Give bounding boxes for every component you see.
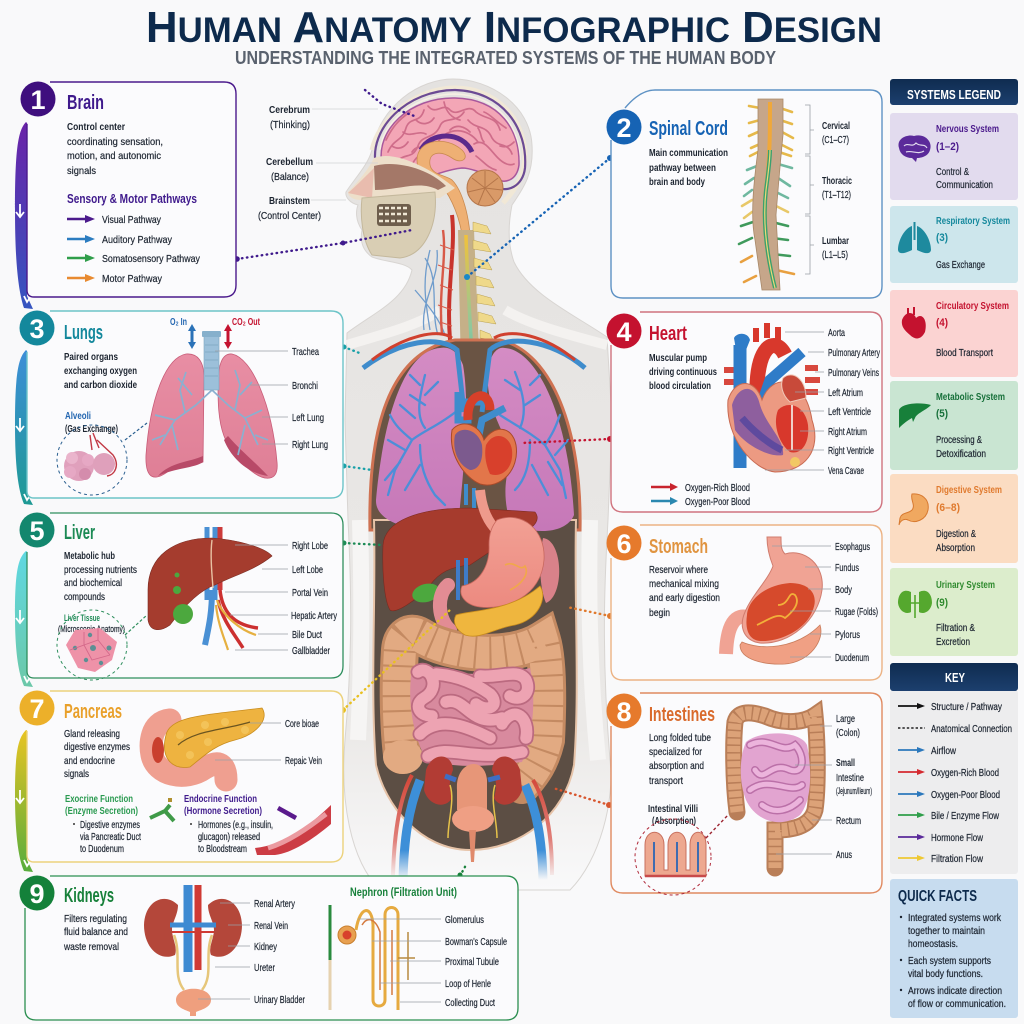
stomach description: mechanical mixing [649, 578, 719, 590]
stomach description [649, 564, 720, 619]
lungs description: Paired organs [64, 351, 118, 363]
legend card: respiratory system [890, 206, 1018, 283]
key arrows and labels: Airflow [931, 746, 957, 757]
pancreas labels: Repaic Vein [285, 755, 322, 767]
brain description: signals [67, 165, 96, 177]
endocrine function: Endocrine Function [184, 793, 257, 805]
legend card: nervous system: Nervous System [936, 124, 999, 135]
stomach and esophagus [461, 490, 559, 607]
torso cavities [370, 340, 580, 850]
neck and spine [415, 215, 496, 425]
heart [451, 392, 517, 510]
legend card: digestive system: Absorption [936, 543, 975, 554]
badge 3: 3 [29, 314, 45, 344]
brain anatomy labels: Cerebrum [269, 104, 310, 116]
heading: spinal cord: Spinal Cord [649, 118, 728, 140]
badge 5 [20, 512, 54, 548]
badge 1 [20, 82, 56, 116]
sensory and motor pathways list: Motor Pathway [102, 273, 163, 285]
gallbladder [410, 581, 442, 605]
brain description [67, 121, 163, 177]
nephron labels [358, 914, 507, 1009]
heart labels [765, 327, 880, 477]
panel: kidneys [20, 876, 518, 1020]
blood flow legend: Oxygen-Rich Blood [685, 482, 750, 494]
exocrine function: to Duodenum [80, 844, 124, 855]
brain anatomy labels: (Control Center) [258, 210, 321, 222]
nephron diagram [330, 885, 457, 1010]
liver labels: Right Lobe [292, 540, 328, 552]
pancreas labels: Core bioae [285, 718, 319, 730]
badge 8 [606, 694, 642, 728]
spinal region brackets and labels [805, 105, 852, 274]
badge 2 [606, 110, 642, 144]
liver labels [225, 540, 338, 657]
intestinal villi inset: Intestinal Villi [648, 803, 698, 815]
sensory and motor pathways list: Sensory & Motor Pathways [67, 191, 197, 206]
lungs description: and carbon dioxide [64, 379, 137, 391]
intestines illustration [734, 713, 817, 868]
liver [383, 508, 537, 611]
key arrows and labels: Structure / Pathway [931, 702, 1002, 713]
liver description: Metabolic hub [64, 550, 115, 562]
sensory and motor pathways list [67, 191, 201, 285]
panel: liver [20, 512, 343, 680]
panel: heart [606, 312, 882, 512]
liver labels: Portal Vein [292, 587, 328, 599]
spinal region brackets and labels: Thoracic [822, 175, 852, 187]
legend card: metabolic system: Metabolic System [936, 392, 1005, 403]
icon: heart [902, 307, 926, 338]
sensory and motor pathways list: Visual Pathway [102, 214, 162, 226]
quick facts panel: vital body functions. [908, 969, 983, 980]
intestines labels: (Jejunum/Ileum) [836, 786, 872, 796]
iliac vessels [393, 775, 552, 880]
exocrine function [65, 793, 141, 855]
panel: brain [20, 82, 236, 297]
legend card: metabolic system: Detoxification [936, 449, 986, 460]
heart labels: Vena Cavae [828, 465, 864, 477]
badge 2: 2 [616, 113, 632, 143]
key arrows and labels: Oxygen-Rich Blood [931, 768, 999, 779]
hepatic vessels [458, 558, 466, 600]
endocrine function: to Bloodstream [198, 844, 247, 855]
spinal region brackets and labels: (C1–C7) [822, 134, 849, 146]
badge 6: 6 [616, 529, 632, 559]
intestines labels: Intestine [836, 772, 864, 784]
intestines description: specialized for [649, 746, 702, 758]
panel: lungs [20, 310, 343, 498]
connector dots from panels to body [234, 90, 613, 878]
stomach illustration [726, 537, 822, 664]
intestines labels: Large [836, 713, 855, 725]
kidneys illustration [144, 885, 242, 1016]
pancreas description: and endocrine [64, 755, 115, 767]
badge 4 [606, 314, 642, 348]
intestinal villi inset [635, 803, 728, 895]
stomach labels: Esophagus [835, 541, 870, 553]
intestines description: transport [649, 775, 683, 787]
quick facts panel: homeostasis. [908, 939, 958, 950]
stomach labels: Pylorus [835, 629, 860, 641]
flow ribbon: brain to lungs [15, 122, 33, 309]
endocrine function [184, 793, 273, 855]
pancreas description: signals [64, 768, 89, 780]
brain description: Control center [67, 121, 125, 133]
spinal region brackets and labels: Lumbar [822, 235, 849, 247]
badge 9: 9 [29, 879, 45, 909]
badge 3 [20, 310, 54, 346]
badge 8: 8 [616, 697, 632, 727]
intestines labels: (Colon) [836, 727, 860, 739]
key arrows and labels: Bile / Enzyme Flow [931, 811, 1000, 822]
key arrows and labels: Oxygen-Poor Blood [931, 790, 1000, 801]
heart labels: Pulmonary Artery [828, 347, 880, 359]
stomach labels [772, 541, 878, 664]
legend card: urinary system: Excretion [936, 637, 970, 648]
pancreas [454, 586, 543, 636]
intestines description [649, 732, 711, 787]
legend card: digestive system: (6–8) [936, 502, 960, 514]
exocrine function: via Pancreatic Duct [80, 832, 141, 843]
pancreas description: Gland releasing [64, 728, 120, 740]
pancreas description: digestive enzymes [64, 741, 130, 753]
icon: hormone arrow [168, 798, 172, 802]
spinal cord description: Main communication [649, 147, 728, 159]
brain anatomy labels: (Thinking) [270, 119, 310, 131]
intestinal villi inset: (Absorption) [652, 815, 696, 827]
heading: brain: Brain [67, 92, 104, 114]
badge 7 [20, 690, 54, 726]
heart description: Muscular pump [649, 352, 707, 364]
alveoli inset: Alveoli [65, 410, 91, 422]
heading: kidneys: Kidneys [64, 885, 114, 907]
spinal cord description: brain and body [649, 176, 705, 188]
legend card: metabolic system: Processing & [936, 435, 982, 446]
pancreas labels [215, 718, 322, 767]
lungs labels [215, 346, 328, 451]
quick facts panel [890, 879, 1018, 1018]
nephron labels: Collecting Duct [445, 997, 495, 1009]
heart labels: Aorta [828, 327, 845, 339]
kidneys labels: Ureter [254, 962, 275, 974]
liver labels: Gallbladder [292, 645, 330, 657]
badge 5: 5 [29, 516, 45, 546]
badge 9 [20, 876, 54, 910]
airflow arrows [170, 316, 260, 349]
nephron diagram: Nephron (Filtration Unit) [350, 885, 457, 899]
flow ribbon: lungs to liver [15, 350, 33, 505]
brain anatomy labels: (Balance) [271, 171, 309, 183]
panel: spinal cord [606, 90, 882, 298]
heart labels: Left Atrium [828, 387, 863, 399]
icon: brain [899, 135, 931, 162]
icon: blood vessel [255, 805, 331, 855]
heart description: blood circulation [649, 380, 711, 392]
icon: lungs [898, 222, 931, 253]
blood flow legend [651, 482, 750, 508]
heart labels: Right Atrium [828, 426, 867, 438]
intestines description: absorption and [649, 760, 704, 772]
quick facts panel: QUICK FACTS [898, 888, 977, 905]
kidneys labels: Urinary Bladder [254, 994, 305, 1006]
legend card: nervous system: (1–2) [936, 141, 959, 153]
kidneys labels: Renal Artery [254, 898, 296, 910]
stomach labels: Rugae (Folds) [835, 606, 878, 618]
quick facts panel: Arrows indicate direction [908, 986, 1002, 997]
nephron labels: Loop of Henle [445, 978, 491, 990]
kidneys description: fluid balance and [64, 926, 128, 938]
heart illustration [724, 323, 820, 472]
key arrows and labels: Filtration Flow [931, 854, 984, 865]
pancreas illustration [151, 708, 264, 780]
quick facts panel: Each system supports [908, 956, 991, 967]
intestines labels: Anus [836, 849, 852, 861]
liver tissue inset: (Microscopic Anatomy) [58, 624, 125, 635]
brain description: motion, and autonomic [67, 150, 161, 162]
lungs description: exchanging oxygen [64, 365, 137, 377]
nephron labels: Glomerulus [445, 914, 484, 926]
kidneys and bladder [424, 756, 522, 862]
airflow arrows: O₂ In [170, 316, 187, 328]
spinal region brackets and labels: (L1–L5) [822, 249, 848, 261]
key arrows and labels: Hormone Flow [931, 833, 984, 844]
pancreas description [64, 728, 130, 780]
spinal region brackets and labels: (T1–T12) [822, 189, 851, 201]
kidneys description: Filters regulating [64, 913, 127, 925]
legend card: nervous system: Communication [936, 180, 993, 191]
legend card: nervous system [890, 113, 1018, 200]
brain anatomy labels: Brainstem [269, 195, 310, 207]
stomach labels: Body [835, 584, 853, 596]
icon: stomach [899, 494, 928, 525]
heading: heart: Heart [649, 323, 687, 345]
kidneys description [63, 913, 128, 953]
blood flow legend: Oxygen-Poor Blood [685, 496, 750, 508]
legend card: circulatory system [890, 290, 1018, 377]
intestines labels: Small [836, 757, 855, 769]
heart labels: Pulmonary Veins [828, 367, 879, 379]
spinal column illustration [739, 99, 794, 290]
liver description [64, 550, 137, 603]
legend card: digestive system: Digestion & [936, 529, 976, 540]
legend card: respiratory system: Gas Exchange [936, 260, 985, 271]
lungs labels: Trachea [292, 346, 319, 358]
heading: stomach: Stomach [649, 536, 708, 558]
heading: pancreas: Pancreas [64, 701, 122, 723]
liver labels: Hepatic Artery [291, 610, 338, 622]
duodenum [440, 585, 450, 630]
exocrine function: Digestive enzymes [80, 820, 140, 831]
spinal cord description: pathway between [649, 162, 716, 174]
liver description: compounds [64, 591, 105, 603]
stomach description: Reservoir where [649, 564, 708, 576]
legend card: circulatory system: (4) [936, 317, 948, 329]
badge 4: 4 [616, 317, 632, 347]
icon: liver [899, 403, 931, 428]
key arrows and labels [898, 702, 1012, 865]
stomach labels: Fundus [835, 562, 859, 574]
liver tissue inset [57, 610, 147, 680]
small intestine [410, 668, 533, 766]
exocrine function: Exocrine Function [65, 793, 133, 805]
panel: pancreas [20, 690, 343, 862]
heading: intestines: Intestines [649, 704, 715, 726]
legend card: digestive system: Digestive System [936, 485, 1002, 496]
exocrine function: (Enzyme Secretion) [65, 805, 138, 817]
quick facts panel: together to maintain [908, 926, 985, 937]
panel: stomach [606, 525, 882, 680]
legend card: respiratory system: (3) [936, 232, 948, 244]
legend card: metabolic system: (5) [936, 408, 948, 420]
legend card: urinary system [890, 568, 1018, 656]
icon: purple hormone marker [278, 808, 296, 818]
face cross-section [348, 156, 455, 258]
heart description [649, 352, 717, 392]
brain anatomy labels: Cerebellum [266, 156, 313, 168]
endocrine function: (Hormone Secretion) [184, 805, 262, 817]
spinal region brackets and labels: Cervical [822, 120, 850, 132]
kidneys labels [198, 898, 305, 1006]
legend card: urinary system: Urinary System [936, 580, 995, 591]
heading: lungs: Lungs [64, 322, 103, 344]
lungs illustration [146, 331, 277, 478]
stomach description: and early digestion [649, 592, 720, 604]
liver description: processing nutrients [64, 564, 137, 576]
legend card: circulatory system: Blood Transport [936, 348, 993, 359]
legend card: urinary system: Filtration & [936, 623, 975, 634]
legend card: metabolic system [890, 381, 1018, 470]
kidneys description: waste removal [63, 941, 119, 953]
quick facts panel: Integrated systems work [908, 913, 1002, 924]
subtitle: UNDERSTANDING THE INTEGRATED SYSTEMS OF THE HUMAN BODY [235, 48, 776, 68]
endocrine function: glucagon) released [198, 832, 260, 843]
heart labels: Left Ventricle [828, 406, 871, 418]
heart labels: Right Ventricle [828, 445, 874, 457]
legend card: nervous system: Control & [936, 167, 969, 178]
stomach labels: Duodenum [835, 652, 869, 664]
icon: kidneys [898, 591, 932, 618]
sensory and motor pathways list: Auditory Pathway [102, 234, 173, 246]
central anatomical figure [344, 79, 612, 890]
alveoli inset: (Gas Exchange) [65, 424, 118, 435]
skull and brain [375, 90, 525, 250]
nephron labels: Bowman's Capsule [445, 936, 507, 948]
liver labels: Bile Duct [292, 629, 322, 641]
systems legend header: SYSTEMS LEGEND [907, 87, 1001, 102]
lungs labels: Left Lung [292, 412, 324, 424]
icon: enzyme ducts [150, 805, 174, 821]
flow ribbon: liver to pancreas [15, 551, 33, 687]
key panel [890, 663, 1018, 874]
kidneys labels: Renal Vein [254, 920, 288, 932]
legend card: digestive system [890, 474, 1018, 563]
nephron labels: Proximal Tubule [445, 956, 499, 968]
key header [890, 663, 1018, 691]
legend card: urinary system: (9) [936, 597, 948, 609]
liver illustration [148, 527, 272, 650]
lungs labels: Bronchi [292, 380, 318, 392]
systems legend header [890, 79, 1018, 105]
airflow arrows: CO₂ Out [232, 316, 260, 328]
panel: intestines [606, 693, 882, 895]
title: HUMAN ANATOMY INFOGRAPHIC DESIGN [146, 3, 882, 52]
liver tissue inset: Liver Tissue [64, 613, 100, 624]
intestines labels [776, 713, 872, 861]
heading: liver: Liver [64, 522, 95, 544]
heart description: driving continuous [649, 366, 717, 378]
key header: KEY [945, 670, 965, 685]
brain description: coordinating sensation, [67, 136, 163, 148]
sensory and motor pathways list: Somatosensory Pathway [102, 253, 201, 265]
flow ribbon: pancreas to kidneys [15, 730, 33, 872]
badge 1: 1 [30, 85, 46, 115]
quick facts panel: of flow or communication. [908, 999, 1006, 1010]
lungs [363, 334, 585, 531]
brain anatomy labels [258, 104, 378, 222]
lungs labels: Right Lung [292, 439, 328, 451]
endocrine function: Hormones (e.g., insulin, [198, 820, 273, 831]
intestines description: Long folded tube [649, 732, 711, 744]
spinal cord description [649, 147, 728, 188]
lungs description [64, 351, 137, 391]
liver labels: Left Lobe [292, 564, 323, 576]
badge 6 [606, 526, 642, 560]
alveoli inset [57, 410, 147, 495]
badge 7: 7 [29, 694, 45, 724]
stomach description: begin [649, 607, 670, 619]
liver description: and biochemical [64, 577, 122, 589]
kidneys labels: Kidney [254, 941, 278, 953]
intestines labels: Rectum [836, 815, 861, 827]
large intestine [383, 634, 547, 785]
